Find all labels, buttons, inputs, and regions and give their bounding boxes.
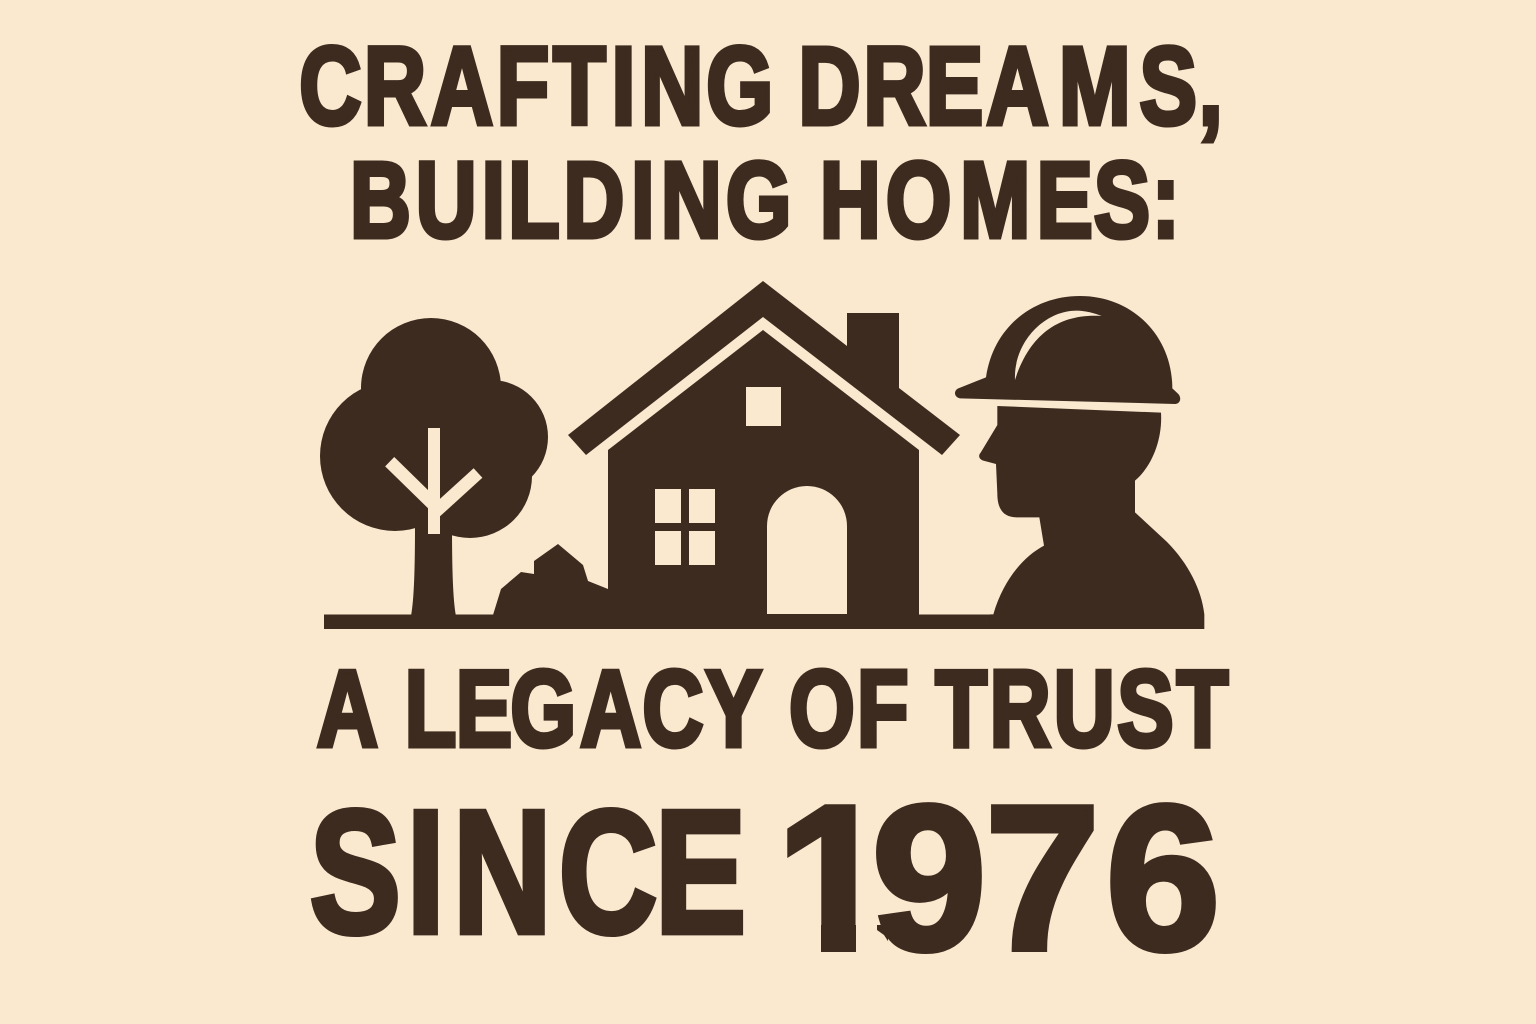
hard hat xyxy=(955,296,1180,404)
icon: builder with hard hat xyxy=(955,296,1204,629)
since: SINCE xyxy=(310,775,746,970)
heading line 1 xyxy=(299,23,1223,147)
tagline: a legacy of trust: LEGACY xyxy=(405,648,762,769)
ground line xyxy=(324,614,1204,629)
icon: house xyxy=(568,281,960,629)
since 1976 xyxy=(310,763,1220,993)
door xyxy=(767,486,847,614)
heading line 1: CRAFTING xyxy=(299,23,773,147)
head and shoulders xyxy=(979,406,1204,629)
illustration: tree, house and builder silhouette xyxy=(320,281,1204,629)
tagline: a legacy of trust: A xyxy=(317,648,378,769)
tagline: a legacy of trust: TRUST xyxy=(935,648,1228,769)
hat highlight xyxy=(1015,311,1102,380)
heading line 2 xyxy=(350,139,1180,260)
heading line 1: DREAMS, xyxy=(798,23,1223,147)
tagline: a legacy of trust: OF xyxy=(789,648,909,769)
icon: tree xyxy=(320,318,548,616)
heading line 2: HOMES: xyxy=(820,139,1180,260)
heading line 2: BUILDING xyxy=(350,139,791,260)
title: crafting dreams, building homes xyxy=(299,23,1223,260)
year 1976: 1976 xyxy=(776,763,1220,993)
window xyxy=(655,489,715,565)
attic window xyxy=(746,387,781,426)
tagline: a legacy of trust xyxy=(317,648,1228,769)
icon: rubble pile xyxy=(493,544,608,615)
